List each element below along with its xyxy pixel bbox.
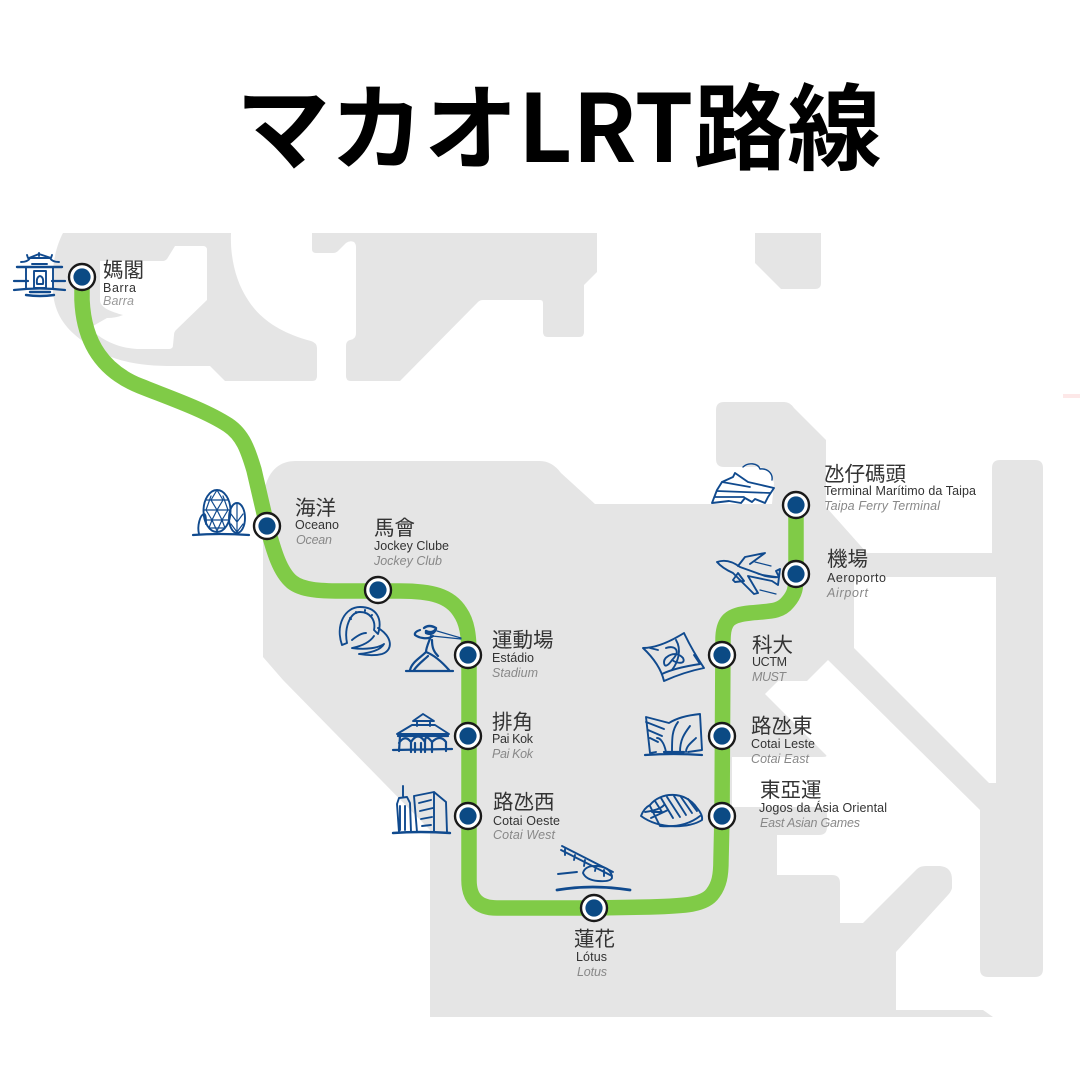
label: Aeroporto: Aeroporto	[827, 571, 886, 585]
label: UCTM: UCTM	[752, 655, 787, 669]
label: Cotai Oeste	[493, 791, 560, 842]
icon: Lotus bridge	[557, 846, 630, 890]
label: Estádio: Estádio	[492, 651, 534, 665]
label: Jockey Clube	[373, 517, 449, 568]
faint marks	[1063, 394, 1080, 398]
label: Jockey Clube: 馬會	[374, 517, 415, 540]
label: Aeroporto: 機場	[827, 548, 868, 571]
label: Lótus: Lótus	[576, 950, 607, 964]
label: Cotai Leste: 路氹東	[751, 715, 812, 738]
icon: A-Ma temple	[14, 253, 65, 296]
label: Barra: Barra	[103, 281, 136, 295]
station marker: Cotai Leste	[709, 723, 735, 749]
label: Lótus	[574, 928, 615, 979]
label: Oceano	[295, 497, 339, 547]
icon: Cotai East	[645, 714, 702, 755]
label: Cotai Leste	[751, 715, 815, 766]
label: Barra: 媽閣	[103, 259, 144, 282]
label: Barra: Barra	[103, 294, 134, 308]
label: Terminal Marítimo da Taipa: 氹仔碼頭	[824, 463, 906, 486]
stations	[69, 264, 809, 921]
label: Estádio	[492, 629, 554, 680]
icon: East Asian Games dome	[641, 795, 702, 826]
label: Jogos da Ásia Oriental	[759, 779, 887, 830]
label: Cotai Leste: Cotai Leste	[751, 737, 815, 751]
station marker: Pai Kok	[455, 723, 481, 749]
land: northern islet	[755, 233, 821, 289]
white cut-out: airport basin	[854, 577, 996, 783]
icon: UCTM book with atom	[643, 633, 704, 681]
route line	[82, 277, 796, 908]
station marker: Lótus	[581, 895, 607, 921]
label: Terminal Marítimo da Taipa: Taipa Ferry Terminal	[824, 499, 941, 513]
station marker: Aeroporto	[783, 561, 809, 587]
label: Cotai Leste: Cotai East	[751, 752, 810, 766]
label: Pai Kok: Pai Kok	[492, 747, 534, 761]
label: Barra	[103, 259, 144, 308]
label: Oceano: Ocean	[296, 533, 332, 547]
label: Oceano: 海洋	[295, 497, 336, 520]
white cut-out: inner harbour	[93, 246, 207, 349]
label: Terminal Marítimo da Taipa: Terminal Marítimo da Taipa	[824, 484, 976, 498]
icon: Pai Kok pavilion	[393, 714, 452, 752]
icon: stadium athlete	[406, 626, 461, 671]
label: UCTM: MUST	[752, 670, 787, 684]
label: Jogos da Ásia Oriental: 東亞運	[760, 779, 822, 802]
station marker: Jogos da Ásia Oriental	[709, 803, 735, 829]
label: Terminal Marítimo da Taipa	[824, 463, 976, 513]
label: Cotai Oeste: 路氹西	[493, 791, 554, 814]
label: Jockey Clube: Jockey Club	[373, 554, 442, 568]
station marker: Jockey Clube	[365, 577, 391, 603]
label: Cotai Oeste: Cotai Oeste	[493, 814, 560, 828]
station marker: Barra	[69, 264, 95, 290]
label: Jogos da Ásia Oriental: East Asian Games	[760, 816, 860, 830]
label: Aeroporto: Airport	[826, 586, 869, 600]
label: Lótus: 蓮花	[574, 928, 615, 951]
label: Estádio: 運動場	[492, 629, 554, 652]
panel: grey land map	[52, 233, 1043, 1017]
label: UCTM	[752, 634, 793, 684]
icon: ocean gardens	[193, 490, 249, 535]
icon: horseshoe	[340, 607, 390, 655]
icon: Cotai West towers	[393, 786, 450, 833]
label: UCTM: 科大	[752, 634, 793, 657]
station marker: UCTM	[709, 642, 735, 668]
station labels	[103, 259, 976, 979]
title: マカオLRT路線	[236, 54, 881, 190]
land: central Macau block	[312, 233, 597, 381]
station marker: Estádio	[455, 642, 481, 668]
label: Estádio: Stadium	[492, 666, 538, 680]
label: Lótus: Lotus	[577, 965, 607, 979]
label: Cotai Oeste: Cotai West	[493, 828, 556, 842]
land: Macau peninsula	[52, 233, 317, 381]
label: Jogos da Ásia Oriental: Jogos da Ásia Oriental	[759, 800, 887, 815]
icon: airport plane	[717, 553, 780, 594]
label: Oceano: Oceano	[295, 518, 339, 532]
land: Taipa and Cotai	[263, 402, 1043, 1017]
station marker: Cotai Oeste	[455, 803, 481, 829]
label: Pai Kok	[492, 711, 534, 761]
label: Jockey Clube: Jockey Clube	[374, 539, 449, 553]
station marker: Terminal Marítimo	[783, 492, 809, 518]
label: Aeroporto	[826, 548, 886, 600]
label: Pai Kok: Pai Kok	[492, 732, 534, 746]
icon: ferry	[712, 464, 774, 503]
station marker: Oceano	[254, 513, 280, 539]
label: Pai Kok: 排角	[492, 711, 533, 734]
